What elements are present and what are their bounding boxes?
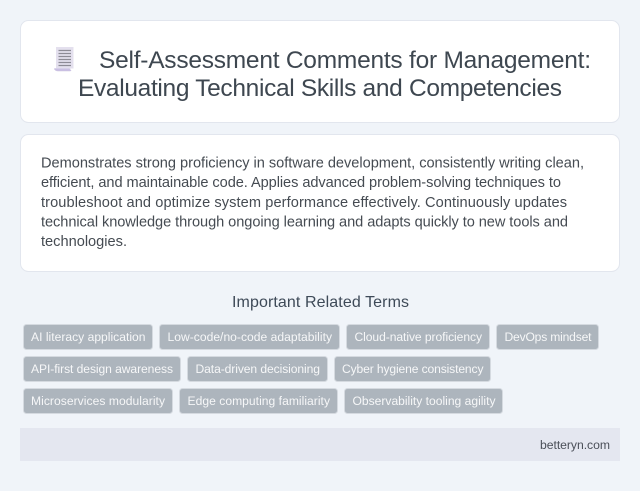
- description text: troubleshoot and optimize system performance effectively. Continuously updates: [41, 195, 567, 211]
- chip: Observability tooling agility: Observability tooling agility: [352, 394, 496, 408]
- chip: Data-driven decisioning: Data-driven decisioning: [196, 362, 320, 376]
- description text: technologies.: [41, 234, 127, 250]
- chip: Data-driven decisioning: [188, 356, 328, 382]
- heading: important related terms: Important Related Terms: [232, 294, 409, 311]
- title: Self-Assessment Comments for Management:: [99, 47, 591, 74]
- chip: API-first design awareness: [24, 356, 180, 382]
- chip: Cloud-native proficiency: Cloud-native proficiency: [354, 330, 483, 344]
- description text: [41, 156, 584, 250]
- chip: Low-code/no-code adaptability: Low-code/no-code adaptability: [168, 330, 333, 344]
- chip: Cyber hygiene consistency: [334, 356, 490, 382]
- chip: AI literacy application: AI literacy application: [31, 330, 146, 344]
- chip: DevOps mindset: DevOps mindset: [504, 330, 592, 344]
- description text: efficient, and maintainable code. Applies advanced problem-solving techniques to: [41, 175, 561, 191]
- description text: technical knowledge through ongoing learning and adapts quickly to new tools and: [41, 214, 568, 230]
- title: [78, 47, 591, 102]
- term chips: [24, 324, 598, 414]
- chip: AI literacy application: [24, 324, 152, 350]
- footer text: betteryn.com: betteryn.com: [540, 438, 610, 452]
- chip: API-first design awareness: API-first design awareness: [31, 362, 173, 376]
- chip: Microservices modularity: Microservices modularity: [31, 394, 166, 408]
- chip: DevOps mindset: [496, 324, 598, 350]
- description text: Demonstrates strong proficiency in software development, consistently writing clean,: [41, 156, 584, 172]
- footer bar: [20, 428, 620, 461]
- panel: description: [20, 134, 620, 272]
- chip: Microservices modularity: [24, 388, 172, 414]
- chip: Low-code/no-code adaptability: [160, 324, 340, 350]
- chip: Cyber hygiene consistency: Cyber hygiene consistency: [342, 362, 484, 376]
- chip: Edge computing familiarity: [180, 388, 338, 414]
- panel: header: [20, 20, 620, 122]
- chip: Cloud-native proficiency: [346, 324, 490, 350]
- chip: Edge computing familiarity: Edge computing familiarity: [188, 394, 331, 408]
- chip: Observability tooling agility: [344, 388, 502, 414]
- title: Evaluating Technical Skills and Competencies: [78, 75, 562, 102]
- icon: document scroll: [54, 47, 74, 72]
